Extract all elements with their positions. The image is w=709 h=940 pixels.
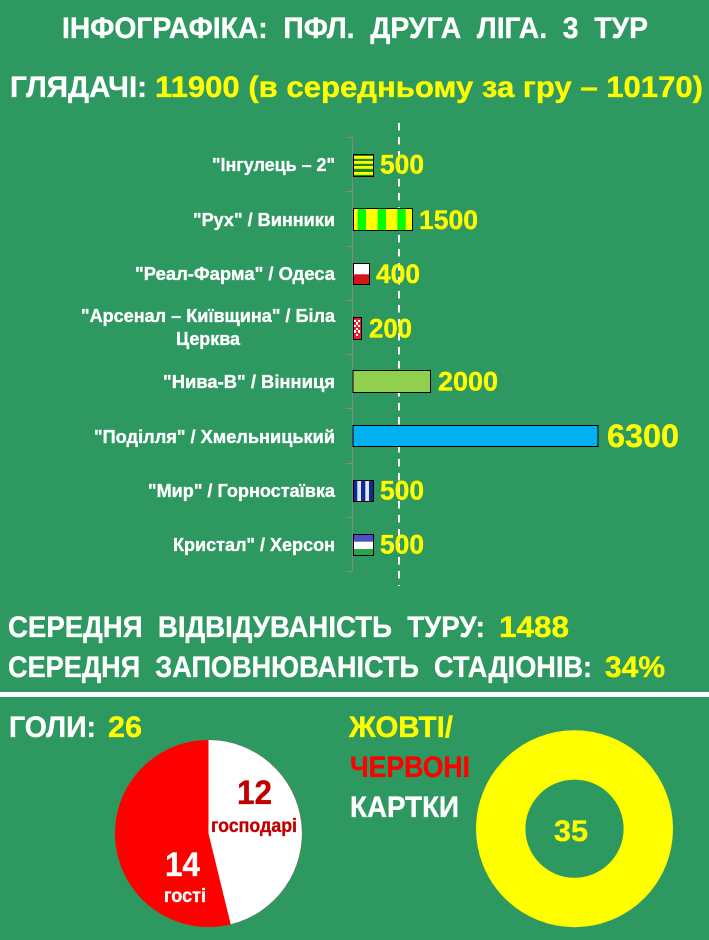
row: Нива-В: "Нива-В" / Вінниця (163, 372, 335, 392)
row: Нива-В: 2000 (438, 366, 498, 396)
heading: spectators total: 11900 (в середньому за гру – 10170) (155, 71, 703, 104)
row: Арсенал-Київщина: Церква (176, 329, 241, 349)
row: Кристал (173, 530, 424, 560)
row: Нива-В (163, 366, 498, 396)
heading: spectators total: ГЛЯДАЧІ: (10, 71, 147, 104)
row: Арсенал-Київщина (81, 306, 412, 349)
pie label: home: господарі (211, 816, 297, 837)
stat: stadium occupancy: 34% (605, 651, 665, 684)
pie label: away (164, 846, 206, 907)
pie label: away: гості (164, 886, 206, 907)
row: Кристал: 500 (380, 530, 424, 560)
row: Поділля (94, 418, 679, 454)
row: Рух (193, 205, 478, 235)
heading: cards (348, 711, 470, 824)
heading: cards: КАРТКИ (350, 791, 459, 824)
pie chart: goals (115, 740, 302, 927)
row: Поділля: 6300 (607, 418, 679, 454)
chart axis (346, 137, 352, 572)
row: Мир: 500 (380, 476, 424, 506)
row: Поділля: "Поділля" / Хмельницький (94, 427, 335, 447)
row: Реал-Фарма: 400 (376, 259, 420, 289)
stat: average attendance: 1488 (499, 611, 569, 644)
row: Реал-Фарма (135, 259, 420, 289)
row: Рух: "Рух" / Винники (193, 210, 335, 230)
row: Інгулець-2: "Інгулець – 2" (212, 155, 335, 175)
row: Кристал: Кристал" / Херсон (173, 535, 335, 555)
heading: goals: ГОЛИ: (9, 711, 96, 744)
row: Мир (148, 476, 424, 506)
bar chart: attendance by match (81, 123, 679, 586)
donut chart: cards (501, 755, 648, 902)
row: Інгулець-2 (212, 150, 424, 180)
pie label: home: 12 (237, 774, 272, 812)
heading: cards: ЖОВТІ/ (348, 711, 454, 744)
pie label: away: 14 (165, 846, 200, 884)
heading: goals: 26 (108, 711, 142, 744)
heading: cards: ЧЕРВОНІ (350, 751, 470, 784)
row: Арсенал-Київщина: "Арсенал – Київщина" / Біла (81, 306, 336, 326)
average line (398, 123, 400, 586)
row: Арсенал-Київщина: 200 (369, 314, 412, 344)
stat: average attendance: СЕРЕДНЯ ВІДВІДУВАНІСТЬ ТУРУ: (8, 611, 485, 644)
stat: stadium occupancy: СЕРЕДНЯ ЗАПОВНЮВАНІСТЬ СТАДІОНІВ: (8, 651, 592, 684)
row: Рух: 1500 (419, 205, 478, 235)
pie label: home (211, 774, 297, 837)
row: Реал-Фарма: "Реал-Фарма" / Одеса (135, 264, 336, 284)
row: Мир: "Мир" / Горностаївка (148, 481, 336, 501)
donut chart: cards: 35 (554, 815, 588, 848)
row: Інгулець-2: 500 (380, 150, 424, 180)
title: ІНФОГРАФІКА: ПФЛ. ДРУГА ЛІГА. 3 ТУР (62, 12, 648, 45)
heading: goals (9, 711, 142, 744)
